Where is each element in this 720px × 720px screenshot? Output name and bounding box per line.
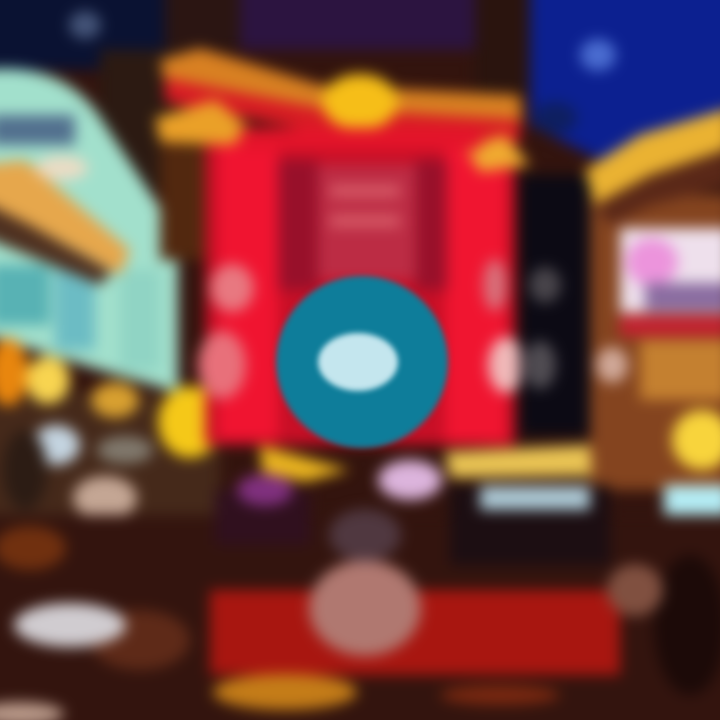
gold canopy — [155, 48, 530, 172]
icon: teal circle badge — [276, 276, 448, 448]
gold counter strip — [260, 445, 592, 510]
lower floor — [0, 460, 720, 720]
right side venue — [585, 108, 720, 529]
black column — [520, 175, 590, 435]
left mint building — [0, 69, 178, 392]
left floor lights — [0, 338, 222, 522]
badge center highlight — [318, 333, 398, 391]
ceiling — [0, 0, 720, 168]
panel: red facade — [160, 130, 524, 445]
left signage band — [0, 156, 130, 285]
